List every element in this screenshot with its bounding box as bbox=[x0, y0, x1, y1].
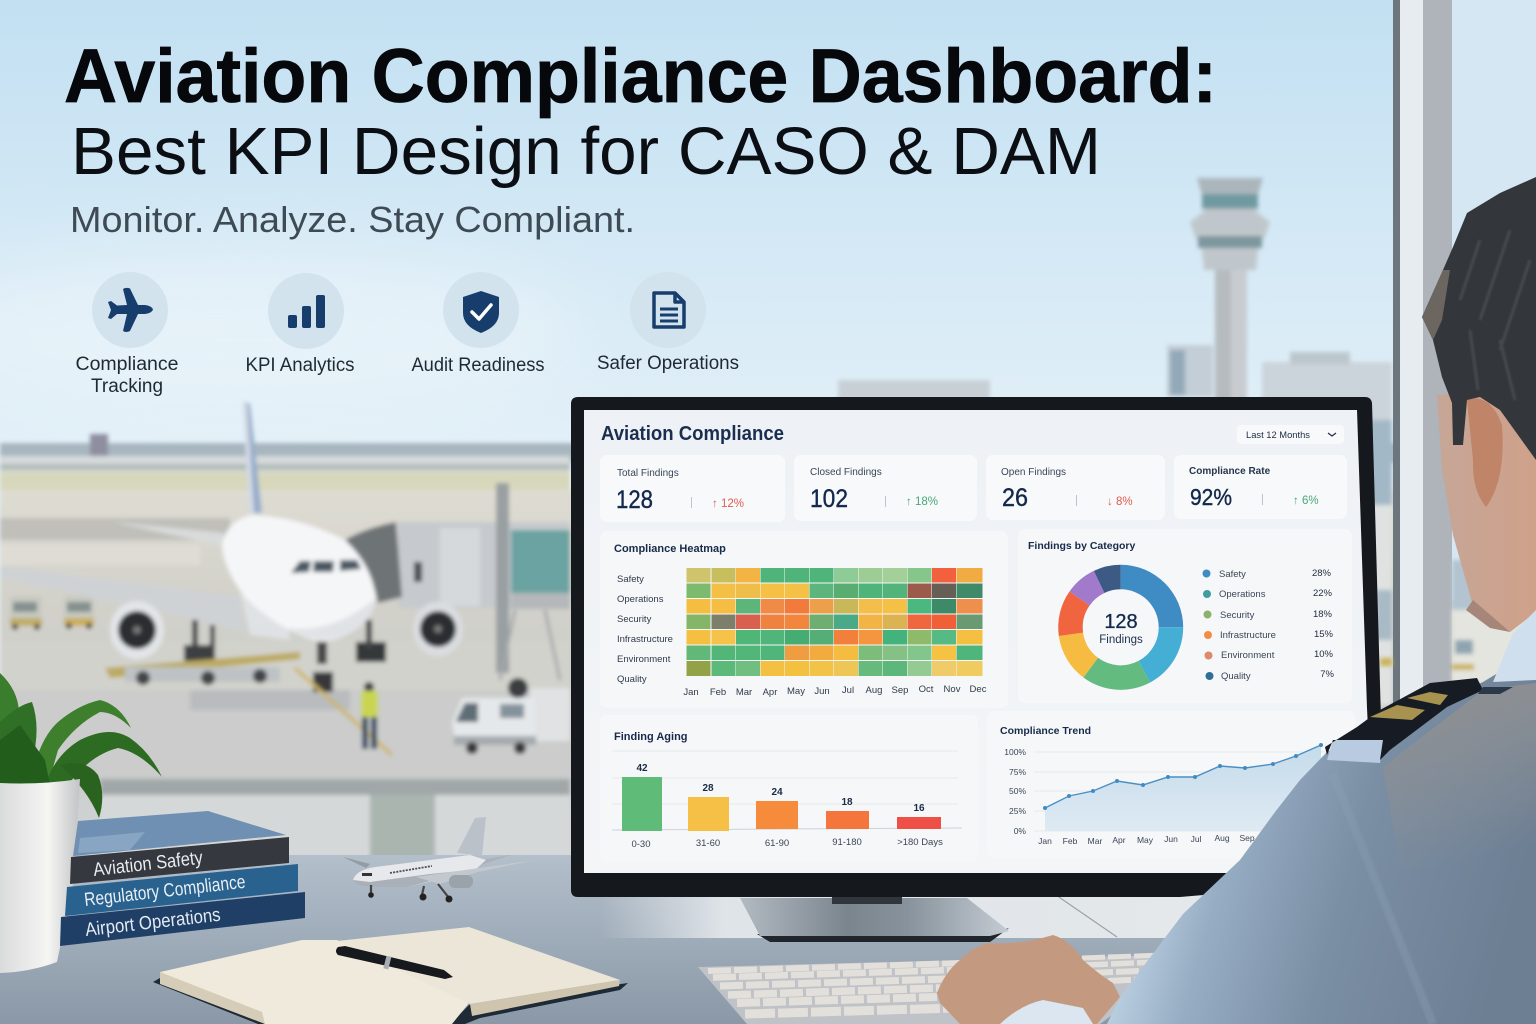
monitor bezel bbox=[571, 397, 1381, 897]
shirt cuff bbox=[1000, 1000, 1093, 1024]
keyboard bbox=[698, 955, 1166, 1024]
bar values: 42 bbox=[636, 763, 648, 774]
x axis labels: Jan bbox=[1038, 836, 1052, 846]
pilot ear bbox=[1467, 398, 1503, 507]
feature: compliance tracking bbox=[76, 272, 178, 397]
y axis labels: 0% bbox=[1014, 826, 1026, 836]
KPI card: compliance rate bbox=[1174, 455, 1347, 519]
model airplane bbox=[343, 817, 535, 902]
bar values: 18 bbox=[841, 797, 853, 808]
book: Airport Operations bbox=[60, 892, 305, 946]
title line one: Aviation Compliance Dashboard: bbox=[64, 34, 1217, 119]
pilot hair bbox=[1422, 177, 1536, 460]
x axis labels: Aug bbox=[1214, 833, 1230, 843]
donut centre label: 128 bbox=[1104, 611, 1138, 633]
KPI card: open findings: 26 bbox=[1002, 484, 1028, 512]
parked ground vehicles bbox=[10, 596, 94, 630]
computer monitor bbox=[571, 397, 1381, 942]
KPI card: compliance rate: Compliance Rate bbox=[1189, 466, 1271, 477]
bars bbox=[622, 777, 941, 831]
bar labels: 31-60 bbox=[696, 838, 720, 849]
control tower bbox=[1190, 178, 1270, 402]
panel: compliance trend line chart: Compliance Trend bbox=[1000, 725, 1091, 737]
yellow taxi line bbox=[295, 668, 392, 755]
airliner fuselage bbox=[222, 515, 376, 692]
heatmap grid bbox=[686, 568, 982, 676]
heatmap month labels: Oct bbox=[919, 684, 934, 695]
book: Aviation Safety: Aviation Safety bbox=[92, 848, 204, 881]
icon: bar chart bbox=[288, 295, 325, 328]
bar labels: 0-30 bbox=[631, 839, 651, 850]
bar values: 16 bbox=[913, 803, 925, 814]
feature: audit readiness bbox=[412, 272, 544, 376]
bar labels: >180 Days bbox=[897, 837, 943, 848]
KPI card: total findings: 128 bbox=[616, 486, 653, 514]
icon: shield with check bbox=[463, 291, 499, 333]
bar labels: 91-180 bbox=[832, 837, 862, 848]
book: Regulatory Compliance: Regulatory Compliance bbox=[83, 872, 247, 911]
category legend: Quality bbox=[1221, 671, 1251, 682]
shirt shoulder lit patch bbox=[1327, 740, 1383, 763]
bar values: 24 bbox=[771, 787, 783, 798]
pilot neck and face bbox=[1437, 390, 1536, 632]
pilot viewed from behind bbox=[1107, 177, 1536, 1024]
headline bbox=[64, 34, 1217, 240]
airliner engines bbox=[110, 601, 463, 662]
panel: compliance trend line chart bbox=[987, 711, 1355, 858]
heatmap month labels: Feb bbox=[710, 687, 726, 698]
desk surface bbox=[0, 855, 1536, 1024]
book: Aviation Safety bbox=[70, 811, 289, 884]
category legend: 10% bbox=[1314, 649, 1334, 660]
trend line with area bbox=[1043, 743, 1323, 831]
stack of books bbox=[60, 811, 305, 946]
KPI card: closed findings: Closed Findings bbox=[810, 467, 882, 478]
heatmap row labels: Operations bbox=[617, 594, 664, 605]
heatmap month labels: Mar bbox=[736, 687, 752, 698]
KPI card: closed findings: 102 bbox=[810, 485, 848, 513]
KPI card: open findings bbox=[986, 455, 1165, 520]
date range dropdown: Last 12 Months bbox=[1246, 430, 1310, 441]
category legend: Safety bbox=[1219, 569, 1246, 580]
category legend: 15% bbox=[1314, 629, 1334, 640]
x axis labels: Sep bbox=[1239, 833, 1255, 843]
heatmap month labels: Nov bbox=[944, 684, 961, 695]
panel: finding aging bar chart bbox=[600, 715, 978, 862]
category legend bbox=[1202, 568, 1335, 682]
feature: KPI analytics: KPI Analytics bbox=[246, 355, 354, 376]
category legend: Environment bbox=[1221, 650, 1275, 661]
donut centre label bbox=[1099, 611, 1143, 646]
heatmap month labels: Jun bbox=[814, 686, 830, 697]
KPI card: total findings bbox=[600, 455, 785, 522]
bar labels: 61-90 bbox=[765, 838, 789, 849]
pilot shirt bbox=[1107, 650, 1536, 1024]
KPI card: open findings: ↓ 8% bbox=[1107, 496, 1133, 508]
window frame mullion bbox=[1380, 0, 1536, 720]
category legend: Security bbox=[1220, 610, 1255, 621]
heatmap month labels: Sep bbox=[892, 685, 908, 696]
x axis labels: Apr bbox=[1112, 835, 1126, 845]
tagline: Monitor. Analyze. Stay Compliant. bbox=[70, 199, 635, 240]
airliner wings and tail bbox=[0, 401, 262, 668]
date range dropdown bbox=[1237, 425, 1344, 444]
title line two: Best KPI Design for CASO & DAM bbox=[71, 114, 1101, 189]
bar values: 28 bbox=[702, 783, 714, 794]
KPI card: compliance rate: ↑ 6% bbox=[1293, 495, 1319, 507]
heatmap month labels bbox=[683, 684, 987, 698]
heatmap month labels: Apr bbox=[763, 687, 777, 698]
heatmap row labels: Quality bbox=[617, 674, 647, 685]
y axis labels: 50% bbox=[1009, 786, 1026, 796]
book: Airport Operations: Airport Operations bbox=[84, 905, 222, 941]
KPI card: closed findings bbox=[794, 455, 977, 521]
x axis labels: Jul bbox=[1191, 834, 1202, 844]
donut centre label: Findings bbox=[1099, 634, 1143, 646]
heatmap row labels: Security bbox=[617, 614, 652, 625]
y axis labels bbox=[1004, 747, 1026, 836]
feature: audit readiness: Audit Readiness bbox=[412, 355, 544, 376]
KPI card: total findings: Total Findings bbox=[617, 468, 679, 479]
potted plant bbox=[0, 673, 162, 973]
distant building bbox=[838, 345, 1392, 705]
white plant pot bbox=[0, 779, 80, 973]
monitor stand bbox=[740, 893, 1009, 942]
icon: document bbox=[654, 293, 684, 327]
feature: safer operations bbox=[597, 272, 739, 374]
panel: findings by category: Findings by Category bbox=[1028, 540, 1136, 552]
x axis labels: May bbox=[1137, 835, 1154, 845]
jet bridge bbox=[345, 483, 570, 698]
heatmap row labels: Environment bbox=[617, 654, 671, 665]
category legend: Infrastructure bbox=[1220, 630, 1276, 641]
heatmap month labels: Jan bbox=[683, 687, 699, 698]
KPI card: closed findings: ↑ 18% bbox=[906, 496, 938, 508]
heatmap month labels: Dec bbox=[970, 684, 987, 695]
bar labels bbox=[631, 837, 943, 850]
heatmap row labels: Infrastructure bbox=[617, 634, 673, 645]
KPI card: open findings: Open Findings bbox=[1001, 467, 1066, 478]
y axis labels: 100% bbox=[1004, 747, 1026, 757]
KPI card: compliance rate: 92% bbox=[1190, 484, 1232, 510]
hand on keyboard bbox=[937, 935, 1120, 1024]
category legend: 22% bbox=[1313, 588, 1333, 599]
donut chart bbox=[1058, 565, 1183, 690]
feature: safer operations: Safer Operations bbox=[597, 353, 739, 374]
dashboard title: Aviation Compliance bbox=[601, 423, 784, 445]
category legend: Operations bbox=[1219, 589, 1266, 600]
service van bbox=[452, 688, 570, 754]
heatmap row labels bbox=[617, 574, 673, 685]
monitor screen bbox=[584, 410, 1375, 873]
shirt collar bbox=[1493, 610, 1536, 682]
feature: compliance tracking: Tracking bbox=[91, 376, 163, 397]
open notebook bbox=[153, 927, 628, 1024]
panel: finding aging bar chart: Finding Aging bbox=[614, 731, 688, 743]
y axis labels: 75% bbox=[1009, 767, 1026, 777]
x axis labels: Mar bbox=[1088, 836, 1102, 846]
heatmap month labels: Jul bbox=[842, 685, 854, 696]
baggage loader bbox=[105, 652, 300, 685]
panel: compliance heatmap: Compliance Heatmap bbox=[614, 543, 726, 555]
icon: airplane bbox=[108, 288, 153, 332]
plant leaves bbox=[0, 673, 162, 818]
heatmap month labels: May bbox=[787, 686, 805, 697]
pen bbox=[336, 946, 453, 979]
ground worker in hi-vis vest bbox=[361, 682, 378, 749]
x axis labels: Jun bbox=[1164, 834, 1178, 844]
x axis labels: Feb bbox=[1063, 836, 1078, 846]
feature: compliance tracking: Compliance bbox=[76, 354, 178, 375]
panel: findings by category bbox=[1018, 529, 1352, 703]
category legend: 18% bbox=[1313, 609, 1333, 620]
feature: KPI analytics bbox=[246, 273, 354, 376]
bar values bbox=[636, 763, 925, 814]
heatmap month labels: Aug bbox=[866, 685, 882, 696]
category legend: 28% bbox=[1312, 568, 1332, 579]
heatmap row labels: Safety bbox=[617, 574, 644, 585]
shoulder epaulette with gold stripes bbox=[1325, 678, 1513, 760]
panel: compliance heatmap bbox=[600, 531, 1008, 708]
y axis labels: 25% bbox=[1009, 806, 1026, 816]
KPI card: total findings: ↑ 12% bbox=[712, 498, 744, 510]
x axis labels bbox=[1038, 833, 1255, 846]
category legend: 7% bbox=[1320, 669, 1335, 680]
